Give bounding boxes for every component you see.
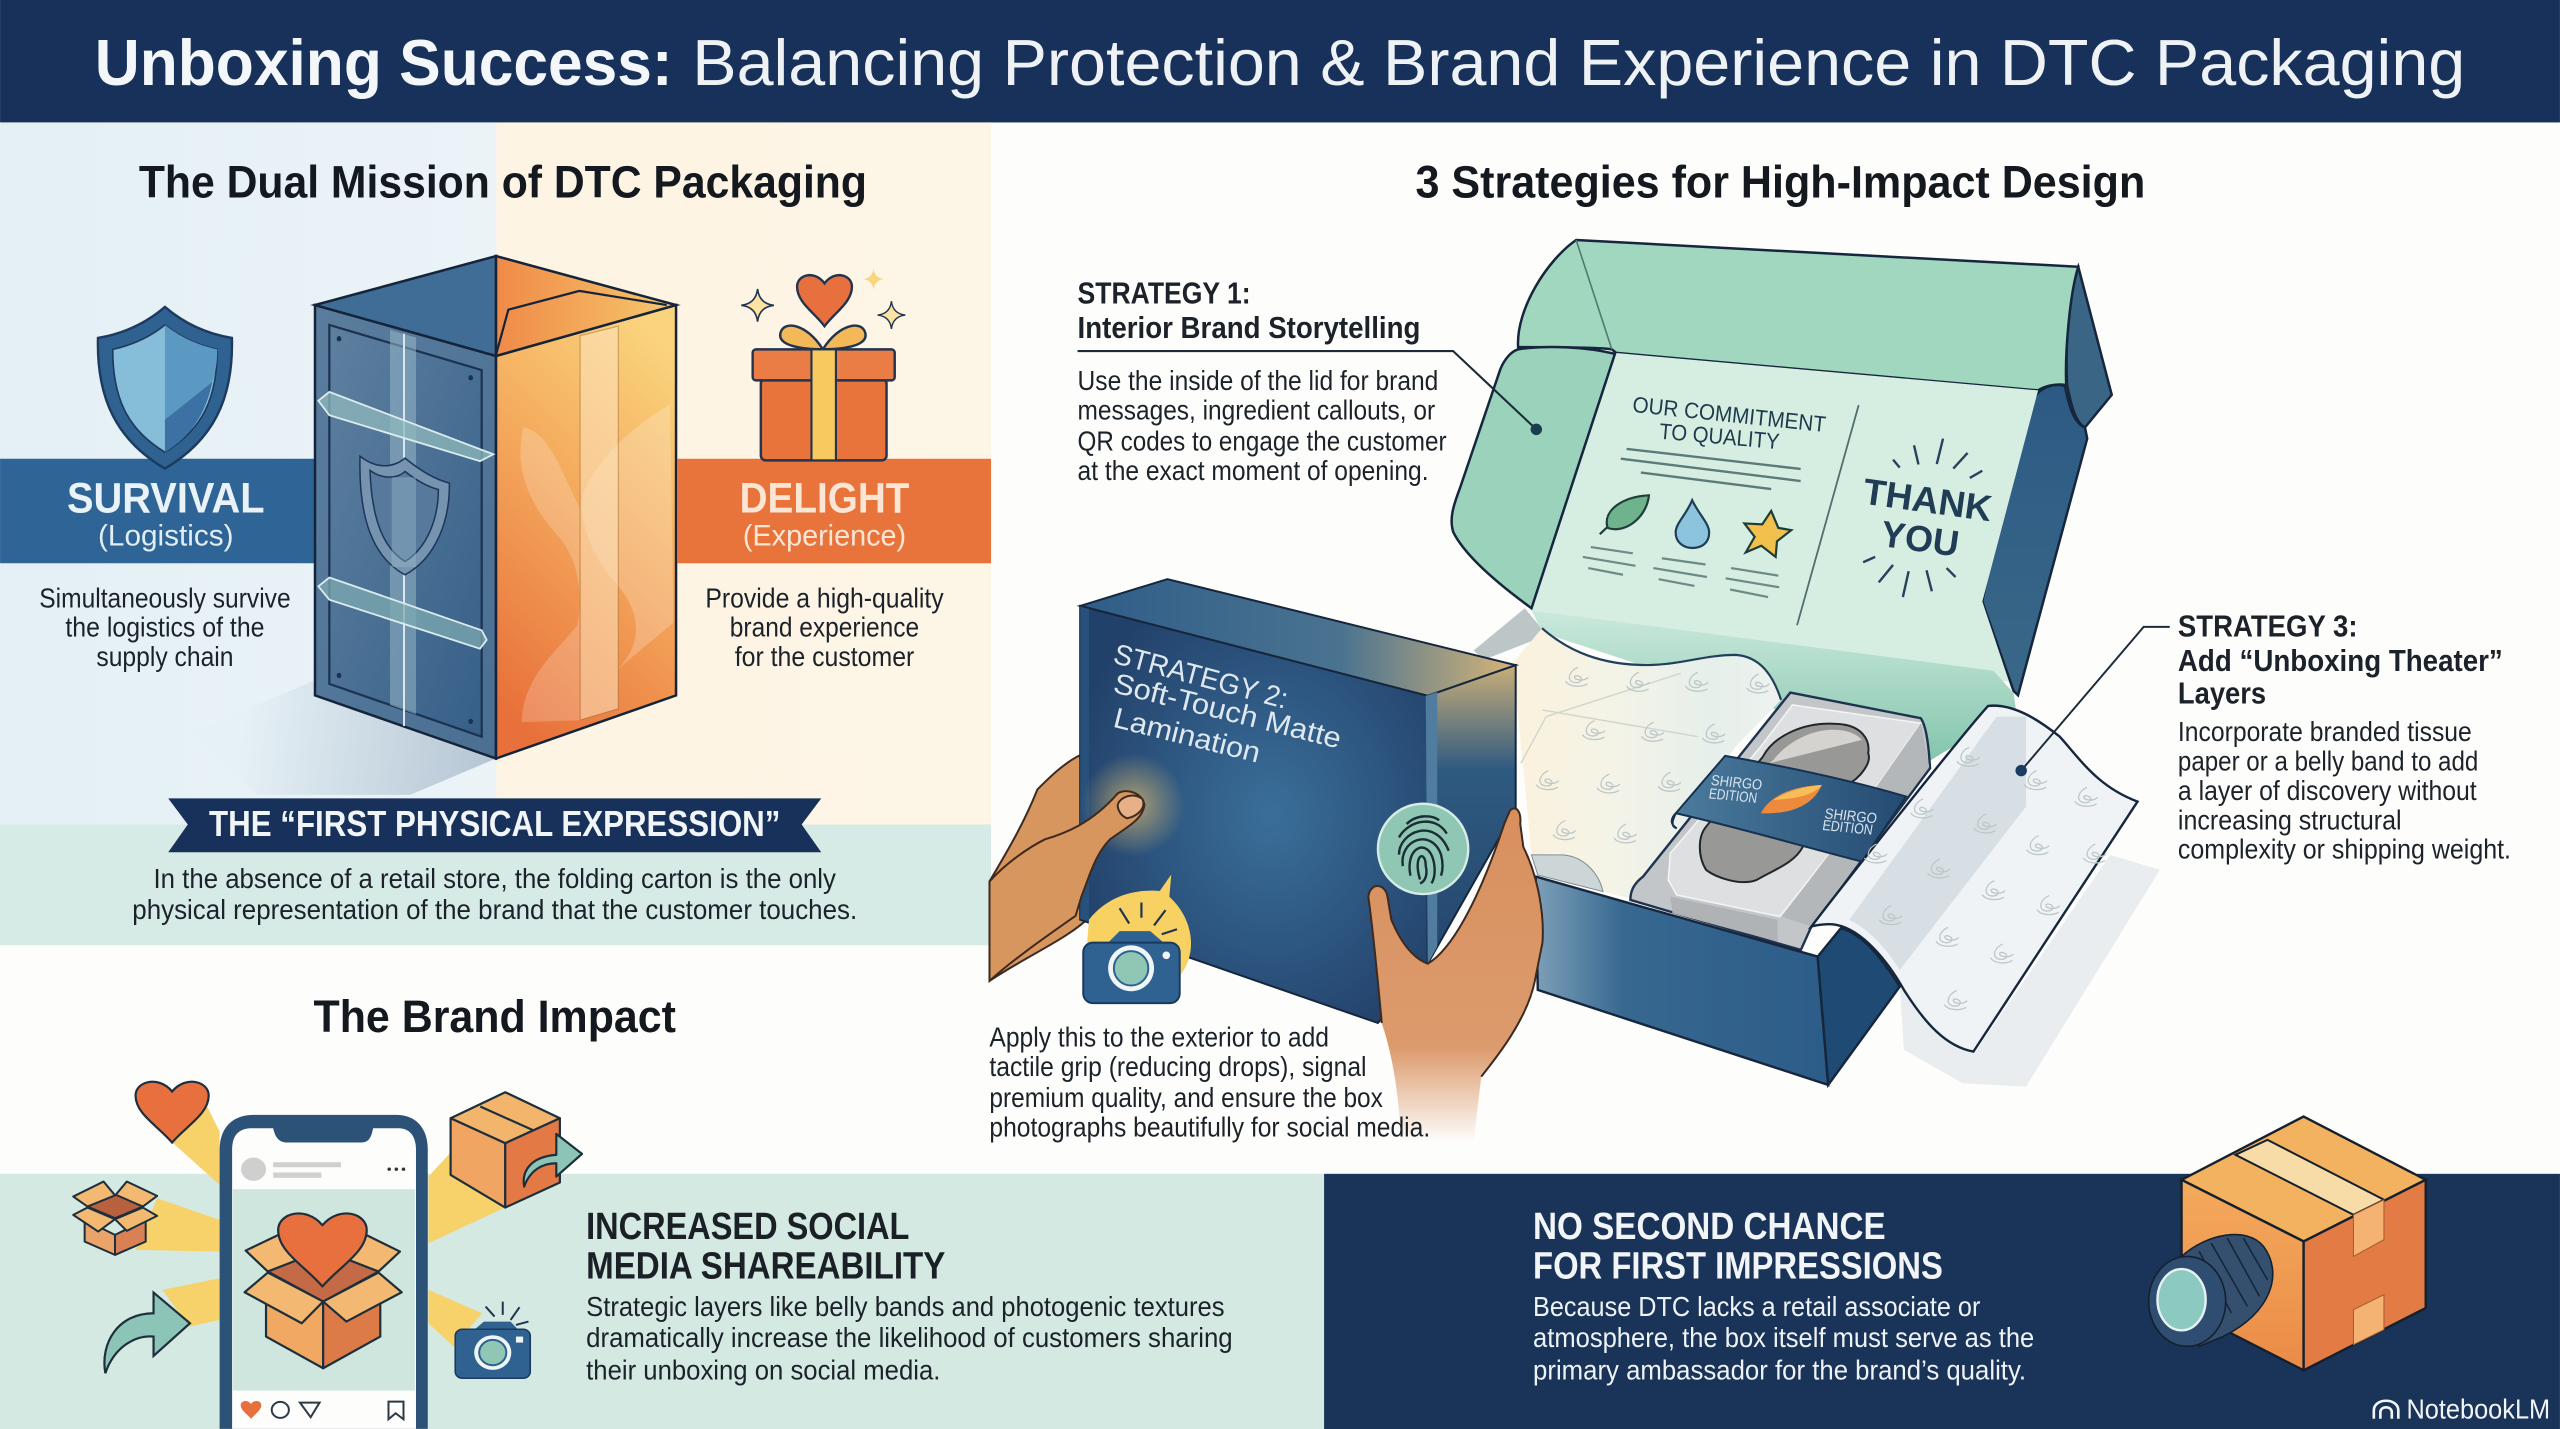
icon: small open box: [73, 1182, 157, 1255]
text: delight description: Provide a high-quality: [705, 582, 944, 613]
strategy 2 label: STRATEGY 2:: [1110, 638, 1291, 716]
icon: camera: [455, 1302, 530, 1378]
text: survival description: Simultaneously survive: [39, 582, 291, 613]
box top: [1080, 579, 1516, 696]
strategy 1 callout: Use the inside of the lid for brand: [1078, 365, 1438, 396]
box base front: [1536, 877, 1828, 1085]
text: survival description: supply chain: [96, 641, 234, 672]
strategy 3 callout: a layer of discovery without: [2178, 775, 2477, 806]
icon: closed box: [451, 1092, 582, 1208]
text: shareability: dramatically increase the likelihood of customers sharing: [586, 1322, 1233, 1353]
strategy 1 callout: [1078, 278, 1542, 486]
text: strategy 2 description: photographs beautifully for social media.: [989, 1111, 1430, 1142]
icon: share arrow: [104, 1293, 190, 1373]
panel: social shareability: [0, 1082, 1324, 1429]
strategy 2 label: Lamination: [1110, 702, 1264, 770]
text: shareability: their unboxing on social media.: [586, 1355, 940, 1386]
lid: OUR COMMITMENT: [1631, 392, 1827, 437]
text: delight description: for the customer: [735, 641, 914, 672]
strategy 3 callout: paper or a belly band to add: [2178, 746, 2478, 777]
strategy 1 callout: at the exact moment of opening.: [1078, 455, 1429, 486]
glow at thumb: [1081, 753, 1185, 857]
text: delight description: [705, 582, 944, 672]
open mailer box: [1452, 240, 2160, 1087]
survival band: (Logistics): [98, 519, 234, 552]
text: first physical expression: [132, 863, 857, 925]
lid: YOU: [1879, 513, 1962, 565]
text: shareability: INCREASED SOCIAL: [586, 1205, 909, 1247]
strategy 1 callout: Interior Brand Storytelling: [1078, 312, 1420, 345]
survival band: SURVIVAL: [67, 475, 265, 522]
rays: [136, 1107, 503, 1347]
text: first impressions: FOR FIRST IMPRESSIONS: [1533, 1244, 1943, 1286]
text: delight description: brand experience: [730, 612, 919, 643]
text: first physical expression: physical representation of the brand that the customer touches.: [132, 894, 857, 925]
strategy 2 label: Soft-Touch Matte: [1110, 668, 1345, 755]
strategy 2 label: [1110, 638, 1345, 770]
icon: fingerprint: [1378, 804, 1468, 894]
box base and contents: [1513, 628, 2160, 1087]
icon: box with camera lens: [2149, 1117, 2426, 1370]
lid: THANK: [1861, 471, 1995, 529]
icon: heart: [136, 1082, 209, 1143]
strategy 1 callout: messages, ingredient callouts, or: [1078, 395, 1435, 426]
text: survival description: the logistics of the: [65, 612, 265, 643]
strategy 3 callout: increasing structural: [2178, 804, 2402, 835]
icon: star: [1744, 511, 1791, 557]
header bar: [0, 0, 2560, 122]
text: strategy 2 description: Apply this to the exterior to add: [989, 1021, 1329, 1052]
product tray: [1630, 693, 1930, 950]
central box: [190, 256, 676, 795]
icon: open box with heart: [245, 1213, 402, 1368]
icon: drop: [1676, 500, 1709, 548]
strategy 1 callout: QR codes to engage the customer: [1078, 426, 1447, 457]
panel: no second chance: [1324, 1117, 2560, 1429]
text: strategy 2 description: tactile grip (reducing drops), signal: [989, 1051, 1367, 1082]
box side face: [1428, 665, 1516, 964]
delight band: [678, 459, 991, 563]
icon: phone: [220, 1115, 428, 1429]
belly band: EDITION: [1708, 785, 1758, 806]
text: first physical expression: In the absence of a retail store, the folding carton is the only: [154, 863, 836, 894]
belly band: [1672, 756, 1906, 862]
lid: [1452, 240, 2112, 760]
panel: dual mission: [0, 122, 991, 945]
subtitle: Balancing Protection & Brand Experience in DTC Packaging: [692, 26, 2465, 99]
left tissue paper: [1513, 628, 1781, 900]
text: shareability: MEDIA SHAREABILITY: [586, 1244, 945, 1286]
strategy 3 callout: [2015, 611, 2511, 865]
belly band: EDITION: [1821, 817, 1874, 838]
right hand: [1368, 808, 1543, 1142]
box front face: [1080, 606, 1428, 1023]
heading: brand impact: The Brand Impact: [314, 991, 676, 1042]
logo: NotebookLM: [2406, 1394, 2550, 1425]
icon: leaf: [1600, 495, 1649, 534]
icon: shield: [98, 307, 232, 469]
box base side: [1818, 928, 1900, 1085]
left hand back: [989, 755, 1091, 981]
text: shareability: [586, 1205, 1233, 1386]
text: first impressions: primary ambassador for the brand’s quality.: [1533, 1355, 2026, 1386]
heading: dual mission: The Dual Mission of DTC Packaging: [139, 157, 867, 208]
survival band: [0, 459, 315, 563]
text: strategy 2 description: [989, 1021, 1430, 1142]
text: first impressions: atmosphere, the box itself must serve as the: [1533, 1322, 2034, 1353]
strategy 3 callout: complexity or shipping weight.: [2178, 834, 2511, 865]
text: first impressions: Because DTC lacks a retail associate or: [1533, 1291, 1980, 1322]
strategy 2 box in hands: [989, 579, 1543, 1142]
banner: [168, 798, 821, 852]
icon: camera with flash: [1083, 875, 1191, 1003]
phone and icons: [73, 1082, 582, 1429]
delight band: DELIGHT: [740, 475, 909, 522]
strategy 3 callout: STRATEGY 3:: [2178, 611, 2358, 644]
icon: gift: [741, 269, 905, 460]
belly band: SHIRGO: [1710, 772, 1763, 793]
text: first impressions: [1533, 1205, 2034, 1386]
text: strategy 2 description: premium quality, and ensure the box: [989, 1082, 1383, 1113]
text: first impressions: NO SECOND CHANCE: [1533, 1205, 1886, 1247]
right tissue paper: [1811, 706, 2138, 1052]
title: Unboxing Success:: [95, 26, 673, 99]
text: survival description: [39, 582, 291, 672]
strategy 3 callout: Add “Unboxing Theater”: [2178, 645, 2503, 678]
text: shareability: Strategic layers like belly bands and photogenic textures: [586, 1291, 1224, 1322]
delight band: (Experience): [743, 519, 906, 552]
lid: TO QUALITY: [1658, 419, 1781, 454]
strategy 3 callout: Layers: [2178, 678, 2266, 711]
heading: strategies: 3 Strategies for High-Impact Design: [1416, 157, 2145, 208]
belly band: SHIRGO: [1823, 805, 1878, 827]
strategy 3 callout: Incorporate branded tissue: [2178, 716, 2472, 747]
strategy 1 callout: STRATEGY 1:: [1078, 278, 1251, 311]
left thumb: [989, 791, 1144, 981]
banner: THE “FIRST PHYSICAL EXPRESSION”: [209, 803, 780, 844]
tissue shadow: [1900, 855, 2160, 1087]
